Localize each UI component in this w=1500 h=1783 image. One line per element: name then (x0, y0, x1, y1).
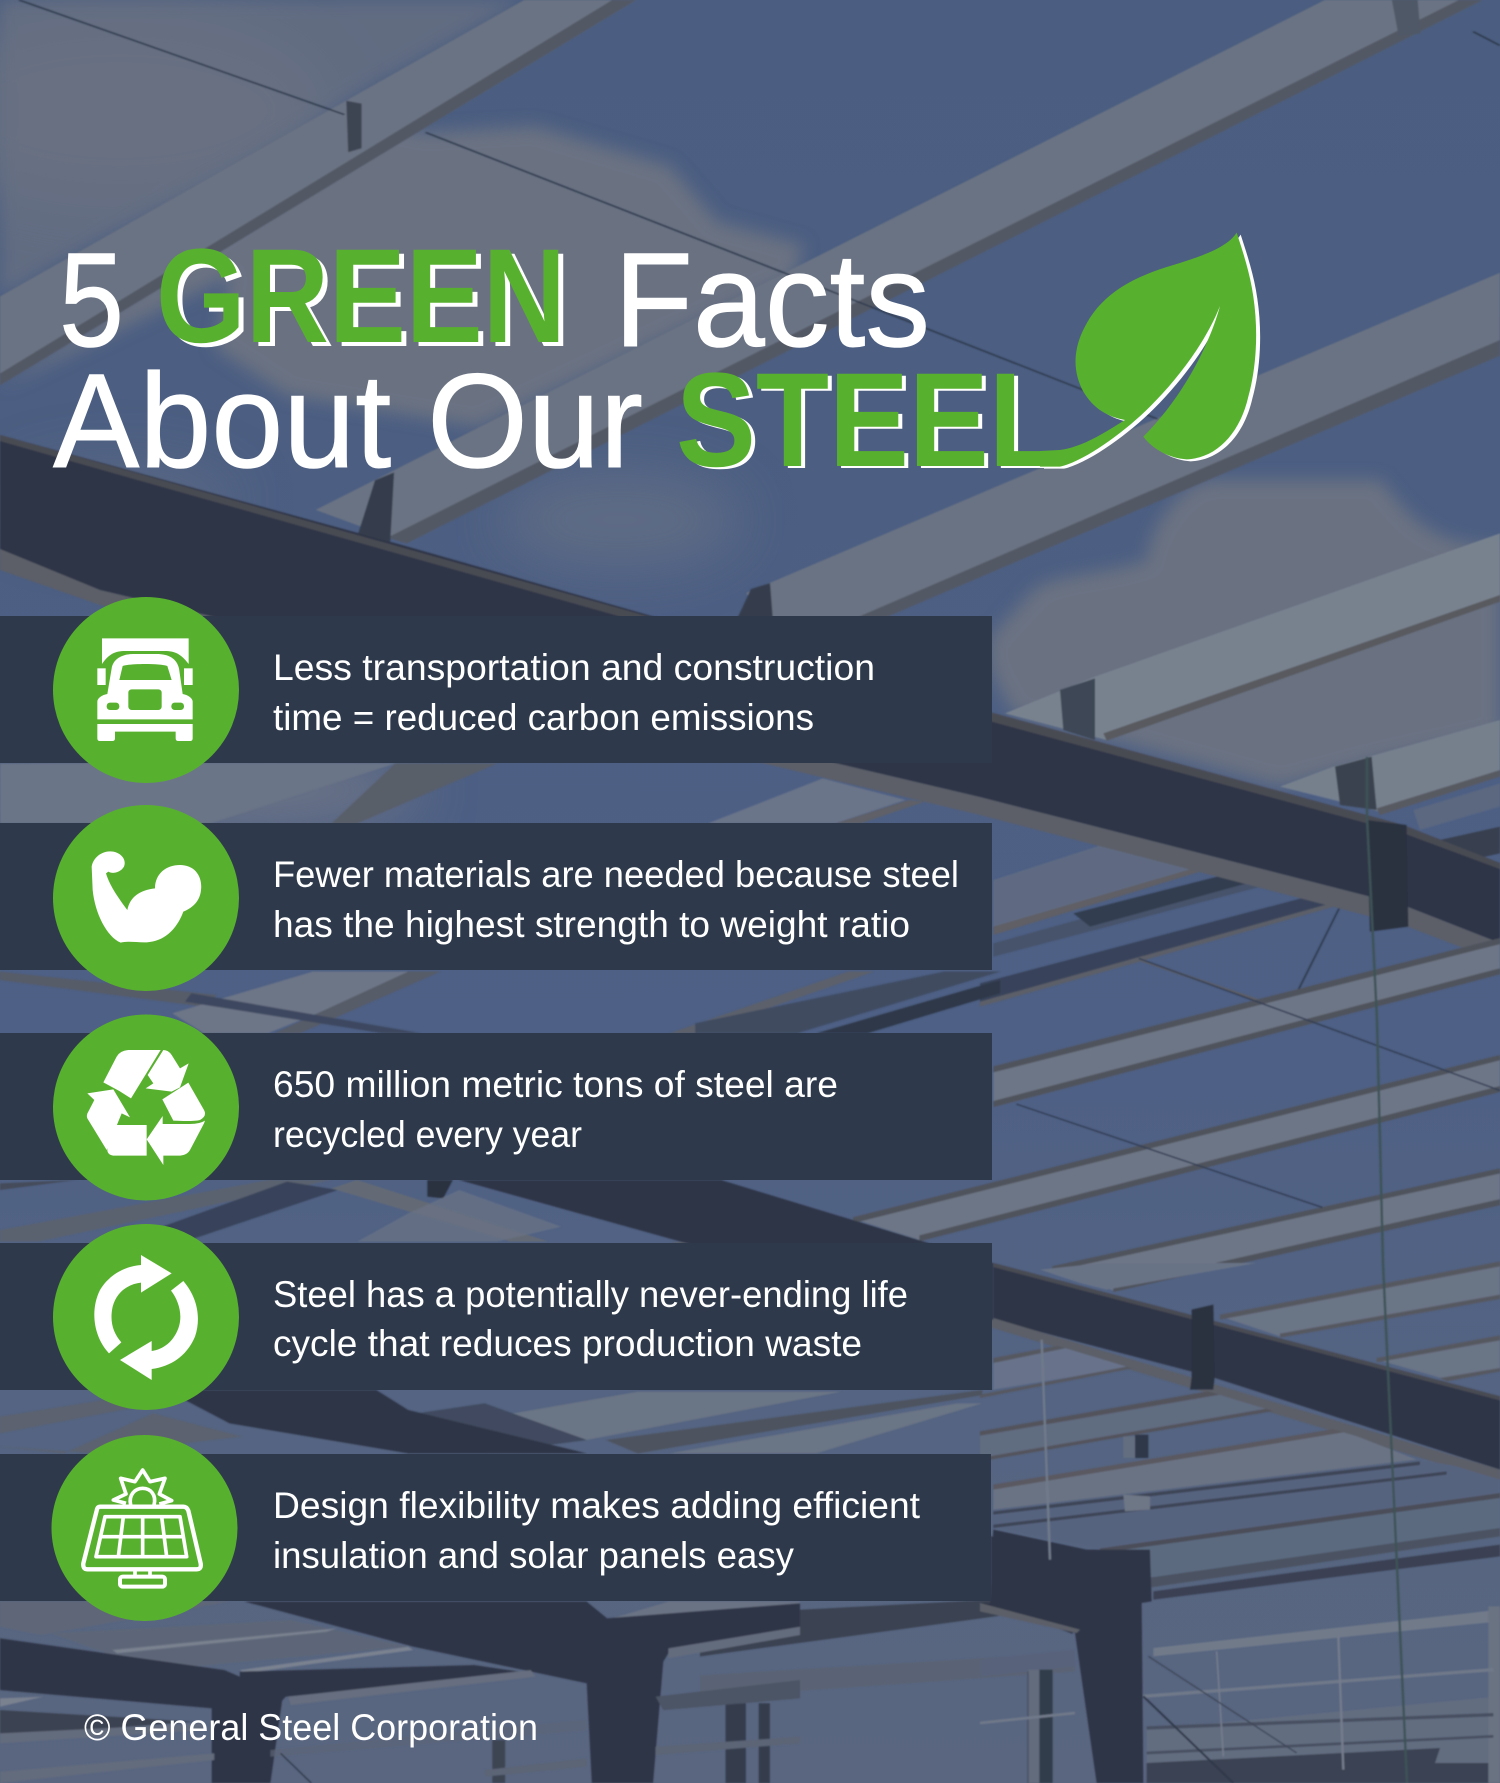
icon: recycle symbol (53, 1014, 239, 1200)
panel: fact 1 transportation (0, 597, 992, 783)
text: fact 1: Less transportation and construction (273, 647, 875, 688)
title line one: 5 (59, 226, 124, 375)
title line one (59, 222, 930, 375)
panel: fact 3 recycling (0, 1014, 992, 1200)
footer: copyright: © General Steel Corporation (84, 1707, 538, 1748)
right side, upper section (980, 533, 1500, 1010)
title line two (53, 346, 1066, 497)
text: fact 3: recycled every year (273, 1114, 582, 1155)
text: fact 3 (273, 1064, 838, 1155)
between panels 4 and 5 (0, 1390, 982, 1453)
right side, lower section (980, 1261, 1500, 1783)
title line two: About Our (53, 347, 643, 496)
text: fact 5: insulation and solar panels easy (273, 1535, 794, 1576)
panel: fact 4 life cycle (0, 1224, 992, 1410)
icon: solar panel (52, 1435, 238, 1621)
text: fact 1 (273, 647, 875, 738)
text: fact 4: cycle that reduces production waste (273, 1323, 862, 1364)
text: fact 3: 650 million metric tons of steel are (273, 1064, 838, 1105)
panel: fact 5 solar (0, 1435, 991, 1621)
text: fact 1: time = reduced carbon emissions (273, 697, 814, 738)
icon: leaf (1040, 233, 1260, 469)
title line one: Facts (614, 226, 930, 375)
text: fact 5 (273, 1485, 921, 1576)
bottom section (0, 1602, 800, 1783)
text: fact 2 (273, 854, 959, 945)
text: fact 5: Design flexibility makes adding efficient (273, 1485, 921, 1526)
title line two: STEEL (680, 348, 1066, 497)
title (53, 222, 1260, 497)
between panels 2 and 3 (0, 972, 1000, 1033)
panel: fact 2 strength (0, 805, 992, 991)
icon: flexed arm (53, 805, 239, 991)
between panels 1 and 2 (0, 763, 925, 823)
text: fact 2: has the highest strength to weight ratio (273, 904, 910, 945)
title line one: GREEN (161, 226, 571, 375)
between panels 3 and 4 (0, 1180, 561, 1242)
text: fact 4 (273, 1274, 908, 1364)
text: fact 2: Fewer materials are needed because steel (273, 854, 959, 895)
second dark beam (670, 1242, 1500, 1482)
main dark beam (0, 545, 1500, 962)
right side, middle section (700, 938, 1500, 1783)
text: fact 4: Steel has a potentially never-ending life (273, 1274, 908, 1315)
icon: truck (53, 597, 239, 783)
upper beams (0, 0, 1500, 620)
title line one: GREEN (156, 222, 566, 371)
icon: cycle arrows (53, 1224, 239, 1410)
title line two: STEEL (676, 346, 1062, 495)
